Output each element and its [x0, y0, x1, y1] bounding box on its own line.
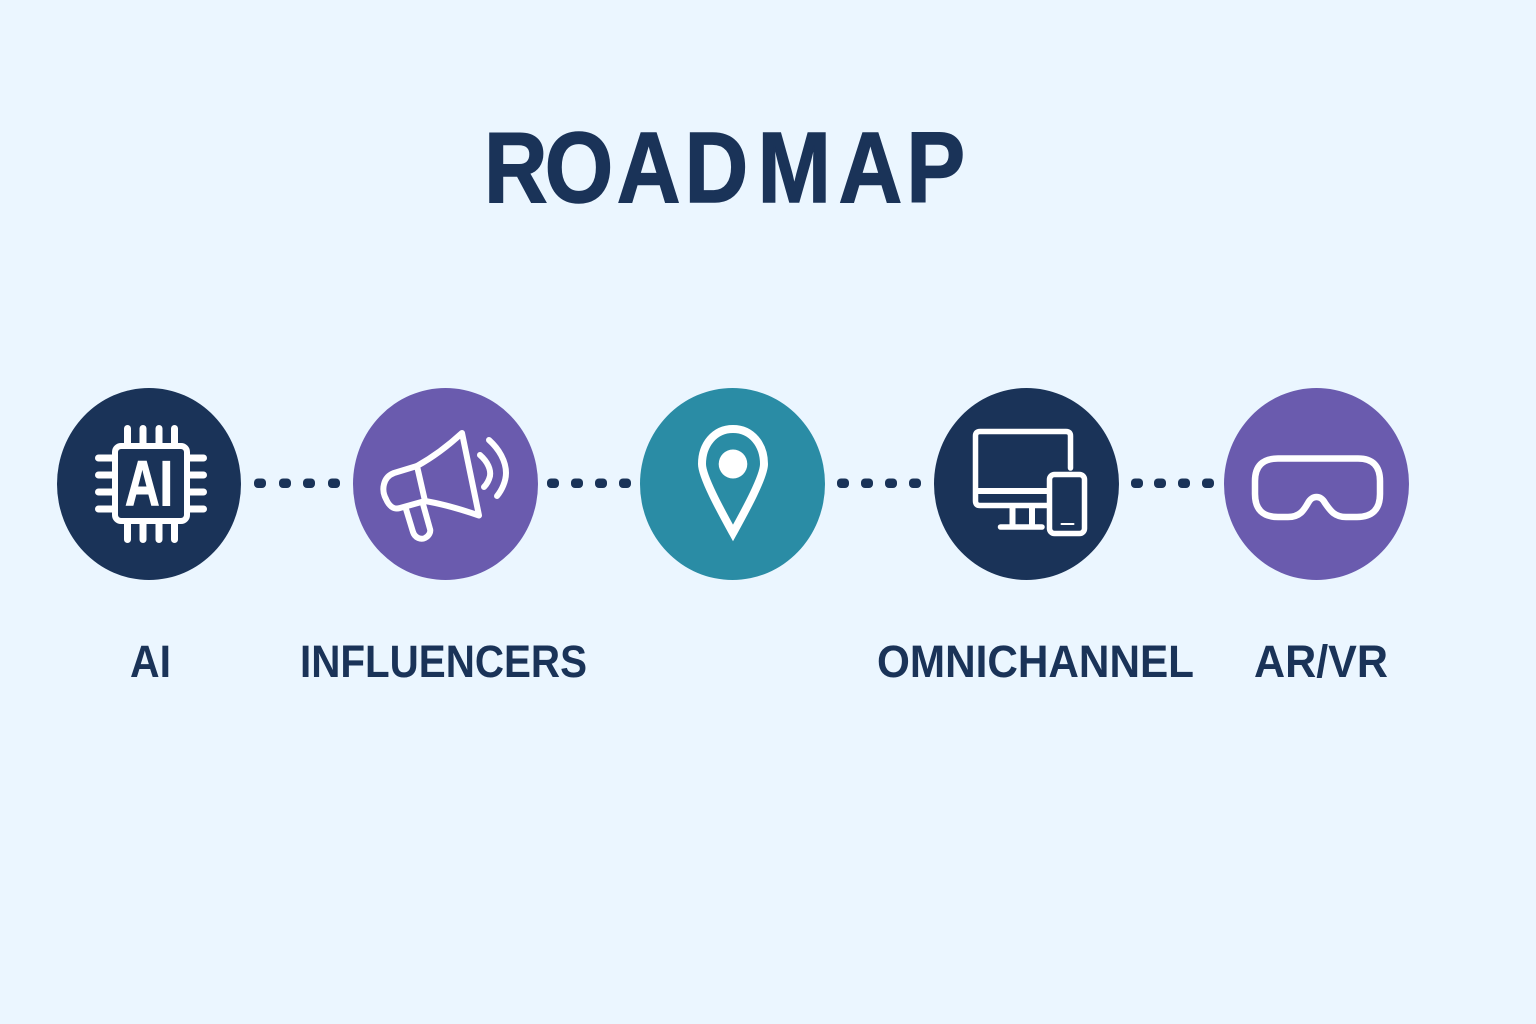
connector: location to omnichannel [837, 478, 921, 488]
node: AI [57, 388, 241, 580]
icon: VR headset [1255, 458, 1380, 517]
connector: AI to influencers [254, 478, 340, 488]
node: influencers [353, 388, 538, 580]
circle: AR/VR [1224, 388, 1409, 580]
icon: map pin [702, 429, 764, 533]
connector: influencers to location [547, 478, 631, 488]
node: location [640, 388, 825, 580]
title: ROADMAP [484, 112, 965, 223]
circle: AI [57, 388, 241, 580]
icon: megaphone [383, 433, 506, 539]
circle: location [640, 388, 825, 580]
icon: AI chip: AI [125, 448, 173, 520]
icon: AI chip [98, 428, 204, 540]
icon: monitor and phone [976, 432, 1084, 534]
connector: omnichannel to AR/VR [1131, 478, 1214, 488]
label: AI: AI [130, 636, 171, 687]
circle: omnichannel [934, 388, 1119, 580]
label: influencers: INFLUENCERS [300, 636, 587, 687]
node: AR/VR [1224, 388, 1409, 580]
label: omnichannel: OMNICHANNEL [877, 636, 1194, 687]
node: omnichannel [934, 388, 1119, 580]
circle: influencers [353, 388, 538, 580]
label: AR/VR: AR/VR [1254, 636, 1388, 687]
